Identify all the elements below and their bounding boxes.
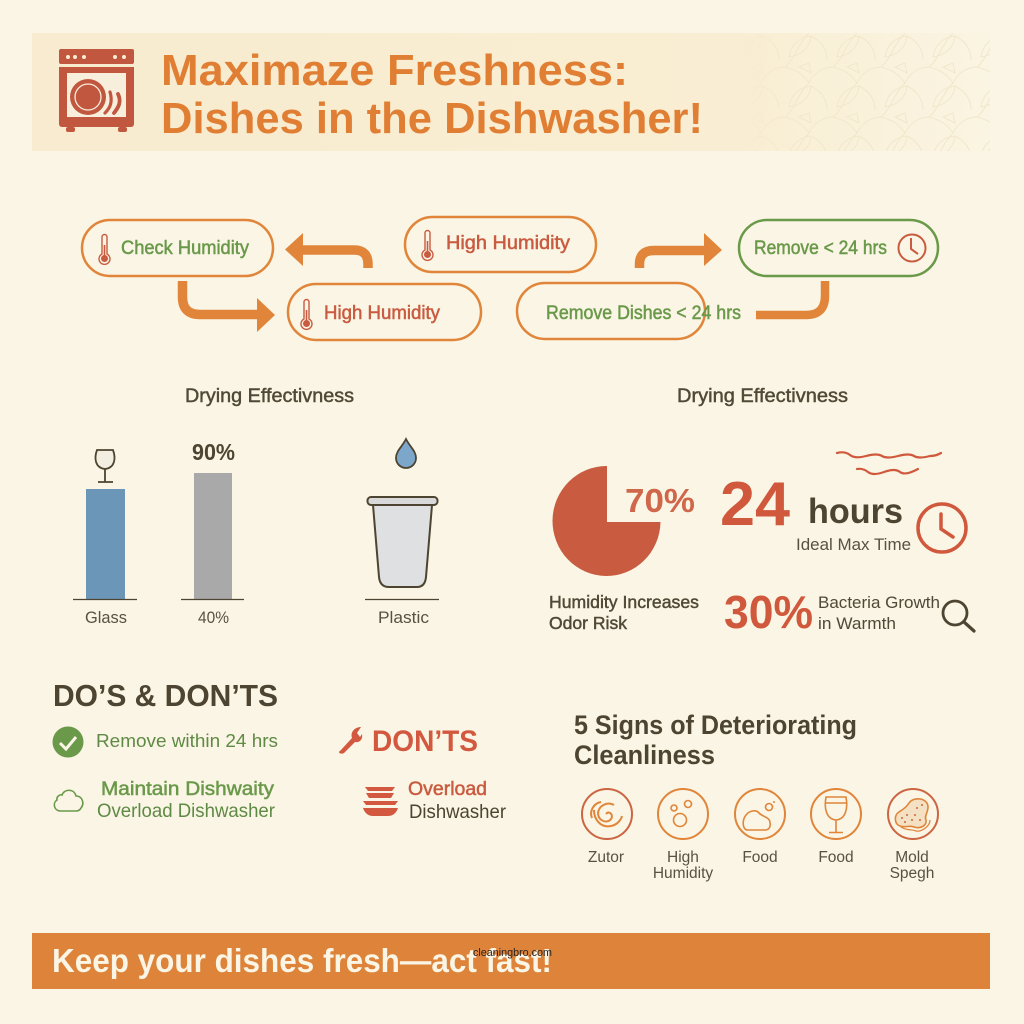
pill: high humidity bottom [288,284,481,340]
label: plastic: Plastic [378,609,429,627]
pill: high humidity bottom: High Humidity [324,303,440,324]
flow diagram [82,217,938,340]
text: maintain: Overload Dishwasher [97,800,275,822]
bar: 90 percent [181,439,244,627]
title: Maximaze Freshness: [161,46,628,95]
bar: glass [73,489,137,627]
stat: 30 percent: 30% [724,586,813,638]
stat: 24 hours: hours [808,492,903,531]
sign: zutor: Zutor [588,849,624,866]
pill: remove dishes: Remove Dishes < 24 hrs [546,303,741,324]
heading: drying left: Drying Effectivness [185,386,354,407]
icon: plates [363,787,398,816]
icon: dishwasher [59,49,134,132]
icon: heat waves [837,452,941,474]
stat: 24 hours: Ideal Max Time [796,535,911,554]
sign: food glass: Food [818,849,854,866]
text: overload [408,778,506,823]
sign: high humidity: Humidity [653,865,713,882]
arrow: to remove [640,233,722,268]
text: bacteria: Bacteria Growth [818,593,940,612]
footer banner [32,933,990,989]
arrow: to high humidity bottom [182,281,275,332]
bar chart [73,439,439,627]
sign: food: Food [742,849,778,866]
icon: plastic cup [368,497,438,587]
bar: glass: Glass [85,609,127,627]
text: remove within: Remove within 24 hrs [96,730,278,751]
text: humidity odor: Odor Risk [549,613,627,633]
stats panel [549,452,974,638]
sign: zutor [582,789,632,866]
heading: five signs [574,710,857,770]
sign: mold sponge [888,789,938,882]
title: Dishes in the Dishwasher! [161,94,703,143]
icon: water drop [396,439,416,468]
icon: check [52,726,84,758]
text: maintain [97,778,275,822]
text: humidity odor: Humidity Increases [549,592,699,612]
pill: remove under 24 [739,220,938,276]
text: bacteria [818,593,940,633]
stat: 24 hours [720,470,911,554]
pill: check humidity: Check Humidity [121,238,249,259]
footer text: Keep your dishes fresh—act fast! [52,942,552,979]
icon: magnifier [943,601,974,631]
icon: cloud [54,790,83,811]
sign: food glass [811,789,861,866]
pill: high humidity top: High Humidity [446,233,571,254]
do's and don'ts [52,678,506,823]
text: humidity odor [549,592,699,633]
pill: remove under 24: Remove < 24 hrs [754,238,887,259]
heading: five signs: Cleanliness [574,740,715,770]
text: bacteria: in Warmth [818,614,896,633]
icon: clock [918,504,966,552]
text: overload: Dishwasher [409,801,506,823]
pill: remove dishes [517,283,741,339]
text: maintain: Maintain Dishwaity [101,778,274,800]
pie chart [553,466,660,576]
sign: food [735,789,785,866]
heading: drying right: Drying Effectivness [677,386,848,407]
watermark: cleaningbro.com [473,947,552,959]
heading: dos and donts: DO’S & DON’TS [53,678,278,713]
stat: 70 percent: 70% [625,482,695,519]
label: plastic [365,600,439,627]
arrow: to check humidity [285,233,368,268]
bar: 90 percent: 40% [198,609,229,627]
stat: 24 hours: 24 [720,470,791,539]
sign: high humidity [653,789,713,882]
sign: high humidity: High [667,849,699,866]
pill: check humidity [82,220,273,276]
bar: 90 percent: 90% [192,439,235,465]
title [161,46,703,143]
five signs [574,710,938,882]
icon: wine glass [96,450,114,482]
arrow: return [756,281,825,315]
pill: high humidity top [405,217,596,272]
icon: wrench [339,727,362,754]
heading: five signs: 5 Signs of Deteriorating [574,710,857,740]
sign: mold sponge: Mold [895,849,929,866]
sign: mold sponge: Spegh [890,865,934,882]
heading: donts: DON’TS [372,725,478,758]
header banner [32,33,990,151]
text: overload: Overload [408,778,487,800]
